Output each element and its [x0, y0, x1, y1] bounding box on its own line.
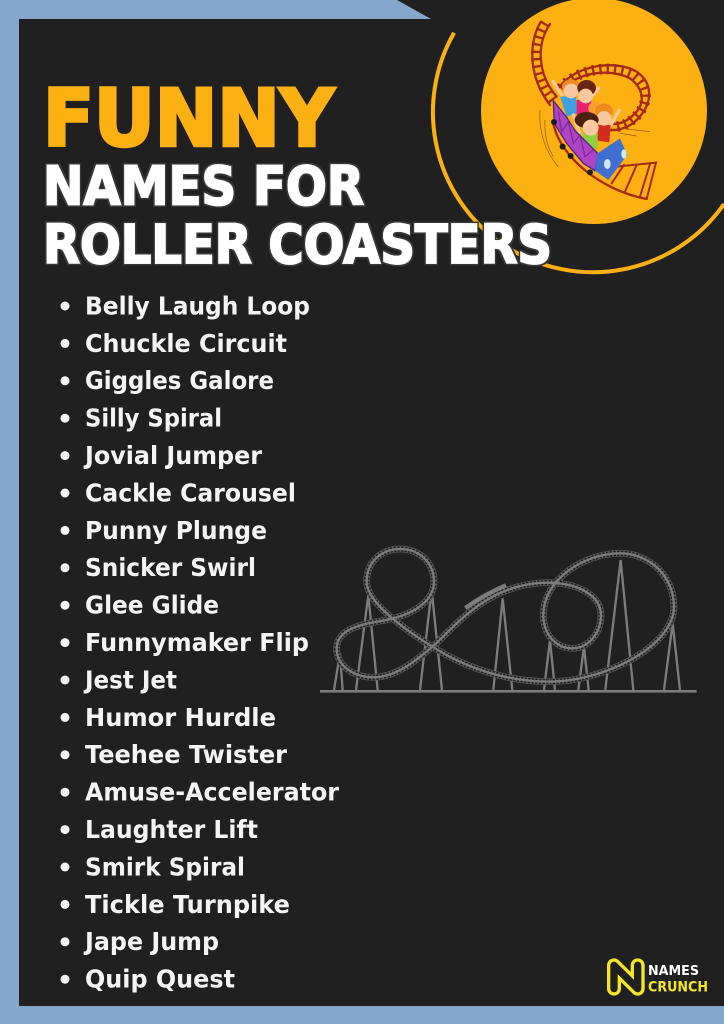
list of funny names: Amuse-Accelerator — [85, 778, 340, 807]
illustration: kids on roller coaster — [532, 22, 656, 199]
list of funny names: Smirk Spiral — [85, 852, 245, 881]
list of funny names: Belly Laugh Loop — [85, 291, 310, 320]
list of funny names: Silly Spiral — [85, 404, 222, 433]
list of funny names: Cackle Carousel — [85, 478, 296, 507]
list of funny names: Jape Jump — [83, 927, 219, 956]
list of funny names: Glee Glide — [85, 591, 219, 620]
kid: green shirt — [573, 112, 599, 150]
roller coaster silhouette — [320, 549, 697, 691]
coaster car — [551, 101, 627, 180]
list of funny names: Snicker Swirl — [85, 553, 256, 582]
motion lines — [540, 110, 650, 167]
decorative ring arc — [433, 33, 724, 272]
list of funny names: Jest Jet — [83, 665, 177, 694]
logo: names crunch — [614, 963, 708, 996]
list of funny names: Laughter Lift — [85, 815, 258, 844]
list of funny names: Chuckle Circuit — [85, 329, 287, 358]
yellow circle badge — [481, 0, 707, 224]
kid: red shirt — [588, 102, 619, 142]
list of funny names: Quip Quest — [85, 965, 235, 994]
kid: pink shirt — [577, 80, 598, 115]
logo word: names: NAMES — [648, 963, 699, 979]
list of funny names: Punny Plunge — [85, 516, 267, 545]
coaster track — [532, 22, 656, 199]
list of funny names — [60, 291, 340, 994]
list of funny names: Funnymaker Flip — [85, 628, 309, 657]
heading word: funny: FUNNY — [43, 74, 335, 164]
logo icon — [614, 965, 638, 989]
list of funny names: Humor Hurdle — [85, 703, 276, 732]
kid: blue shirt — [553, 79, 580, 117]
list of funny names: Giggles Galore — [85, 366, 274, 395]
heading line: names for: NAMES FOR — [43, 154, 364, 218]
title — [43, 74, 552, 276]
list of funny names: Teehee Twister — [85, 740, 288, 769]
logo word: crunch: CRUNCH — [648, 980, 708, 996]
heading line: roller coasters: ROLLER COASTERS — [43, 213, 552, 276]
list of funny names: Tickle Turnpike — [85, 890, 290, 919]
list of funny names: Jovial Jumper — [83, 441, 263, 470]
